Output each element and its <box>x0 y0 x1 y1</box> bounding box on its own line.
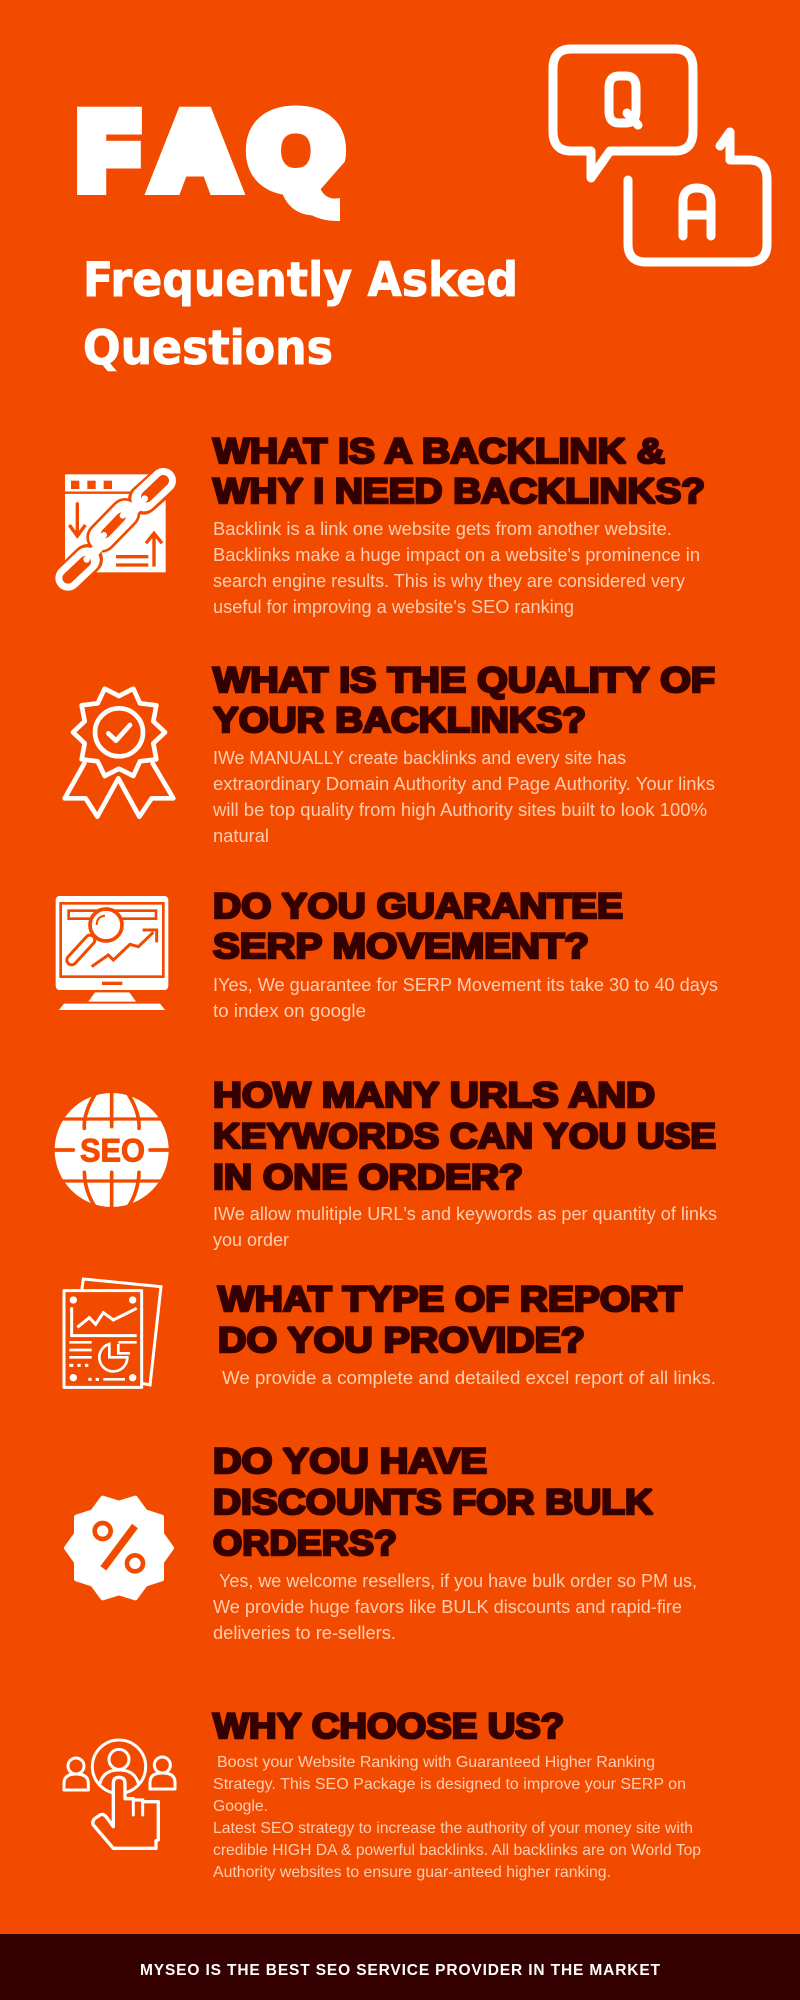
body text <box>212 747 715 846</box>
body text: Backlinks make a huge impact on a website's prominence in <box>213 544 700 565</box>
panel: what is a backlink <box>65 431 705 617</box>
footer banner <box>0 1934 800 2000</box>
body text: will be top quality from high Authority sites built to look 100% <box>212 799 707 820</box>
body text: useful for improving a website's SEO ranking <box>213 596 574 617</box>
heading: WHAT IS THE QUALITY OF <box>213 660 715 700</box>
heading <box>213 1075 716 1197</box>
body text: We provide huge favors like BULK discounts and rapid-fire <box>213 1596 682 1617</box>
body text: natural <box>213 825 269 846</box>
heading: KEYWORDS CAN YOU USE <box>213 1116 716 1156</box>
icon: report pages with charts <box>64 1279 161 1387</box>
subtitle: Frequently Asked Questions: Questions <box>83 321 333 376</box>
body text: Strategy. This SEO Package is designed to improve your SERP on <box>213 1776 686 1793</box>
heading <box>218 1279 682 1360</box>
panel: report type <box>64 1279 716 1388</box>
heading <box>213 1441 653 1563</box>
icon: monitor with magnifier and growth arrow <box>56 896 168 1010</box>
heading: HOW MANY URLS AND <box>213 1075 655 1115</box>
heading: ORDERS? <box>213 1523 397 1563</box>
heading: WHAT IS A BACKLINK & <box>213 431 665 471</box>
heading: WHY CHOOSE US? <box>213 1706 564 1746</box>
body text: you order <box>213 1229 289 1250</box>
title: FAQ: F <box>78 93 138 210</box>
body text: Latest SEO strategy to increase the authority of your money site with <box>213 1820 693 1837</box>
subtitle: Frequently Asked Questions <box>83 253 518 376</box>
heading <box>213 431 705 511</box>
body text <box>213 1203 717 1250</box>
heading: DO YOU PROVIDE? <box>218 1320 585 1360</box>
icon: SEO globe: SEO <box>80 1133 145 1169</box>
body text: to index on google <box>213 1000 366 1021</box>
title: FAQ: Q <box>250 93 342 210</box>
body text <box>213 974 718 1021</box>
panel: quality of backlinks <box>65 660 715 846</box>
body text: IWe MANUALLY create backlinks and every site has <box>213 747 626 768</box>
body text <box>213 1570 697 1643</box>
body text: credible HIGH DA & powerful backlinks. All backlinks are on World Top <box>213 1842 701 1859</box>
icon: Q and A speech bubbles <box>553 49 767 262</box>
body text: Yes, we welcome resellers, if you have bulk order so PM us, <box>219 1570 697 1591</box>
body text <box>213 1754 701 1881</box>
heading: WHY I NEED BACKLINKS? <box>213 471 705 511</box>
heading: DO YOU GUARANTEE <box>213 886 623 926</box>
heading: IN ONE ORDER? <box>213 1157 523 1197</box>
heading: DISCOUNTS FOR BULK <box>213 1482 653 1522</box>
heading: WHAT TYPE OF REPORT <box>218 1279 682 1319</box>
body text: search engine results. This is why they are considered very <box>213 570 686 591</box>
subtitle: Frequently Asked Questions: Frequently Asked <box>83 253 518 308</box>
body text: Backlink is a link one website gets from another website. <box>213 518 672 539</box>
panel: SERP movement <box>56 886 718 1021</box>
body text: IWe allow mulitiple URL's and keywords as per quantity of links <box>213 1203 717 1224</box>
footer banner: MYSEO IS THE BEST SEO SERVICE PROVIDER IN THE MARKET <box>140 1962 661 1979</box>
body text: Google. <box>213 1798 268 1815</box>
heading <box>213 886 623 966</box>
body text <box>213 518 700 617</box>
body text: deliveries to re-sellers. <box>213 1622 396 1643</box>
body text: Authority websites to ensure guar-anteed higher ranking. <box>213 1864 611 1881</box>
heading: YOUR BACKLINKS? <box>213 700 586 740</box>
icon: SEO globe <box>55 1090 169 1210</box>
body text: We provide a complete and detailed excel report of all links. <box>222 1367 716 1388</box>
heading: SERP MOVEMENT? <box>213 926 589 966</box>
title: FAQ <box>78 93 362 221</box>
icon: hand selecting a person <box>64 1740 175 1848</box>
icon: award ribbon with check <box>65 689 173 817</box>
body text: extraordinary Domain Authority and Page Authority. Your links <box>213 773 715 794</box>
heading <box>213 660 715 740</box>
body text: Boost your Website Ranking with Guaranteed Higher Ranking <box>217 1754 655 1771</box>
heading: DO YOU HAVE <box>213 1441 487 1481</box>
panel: why choose us <box>64 1706 701 1881</box>
title: FAQ: A <box>154 93 236 210</box>
panel: bulk discounts <box>66 1441 697 1643</box>
body text: IYes, We guarantee for SERP Movement its take 30 to 40 days <box>213 974 718 995</box>
panel: URLs and keywords <box>55 1075 717 1250</box>
icon: discount percent badge <box>66 1498 172 1598</box>
icon: chain link over web page <box>65 474 166 579</box>
